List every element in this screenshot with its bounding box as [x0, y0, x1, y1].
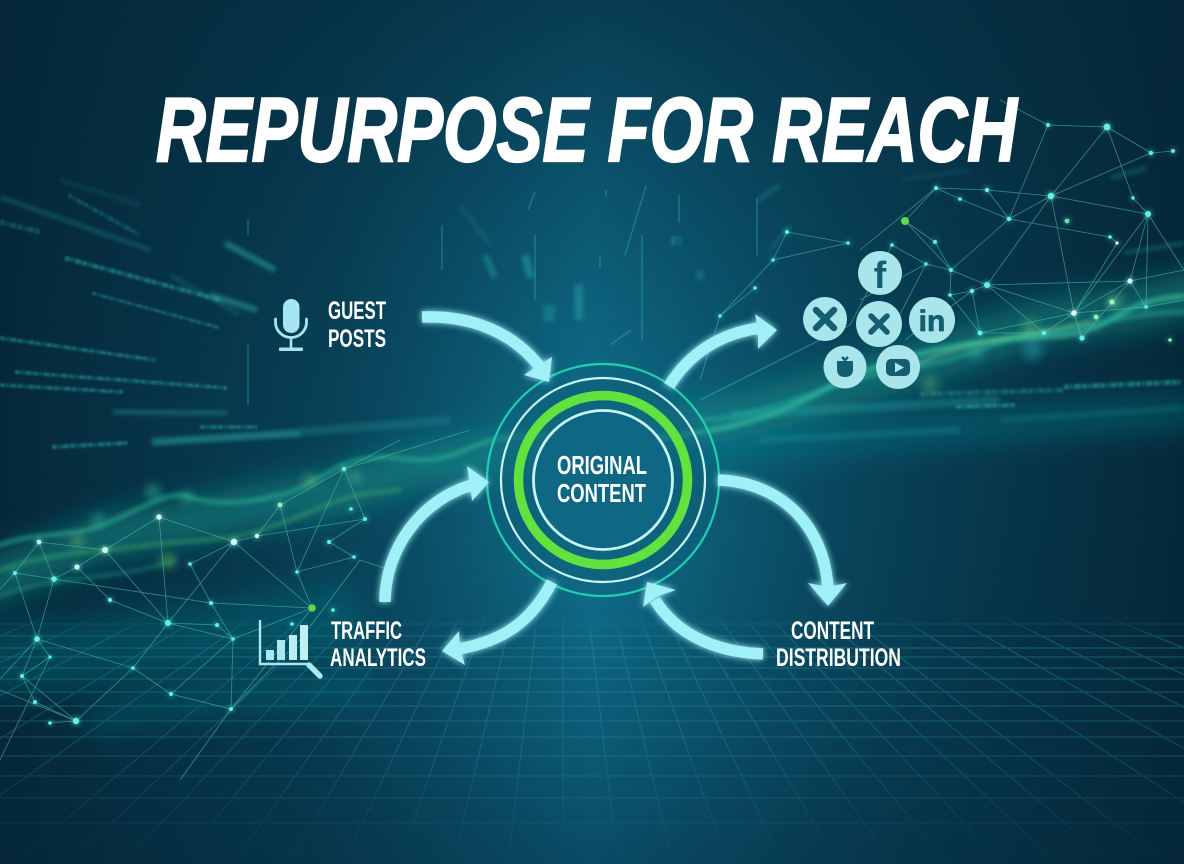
- facebook: f: [874, 255, 887, 297]
- hub label: CONTENT: [557, 478, 646, 508]
- arrow: hub to traffic analytics: [442, 582, 552, 665]
- icon: microphone: [276, 299, 306, 351]
- facebook: [858, 251, 902, 297]
- x center: [856, 301, 902, 347]
- youtube: [876, 345, 920, 389]
- app icon: [824, 346, 866, 388]
- label: traffic analytics: ANALYTICS: [330, 644, 426, 672]
- linkedin: in: [919, 305, 945, 338]
- icon: social media cluster: [803, 251, 955, 389]
- linkedin: [909, 297, 955, 343]
- arrow: hub to social channels: [669, 314, 777, 386]
- arrow: hub to content distribution: [718, 480, 847, 606]
- arrow: traffic analytics to hub: [385, 466, 489, 602]
- arrow: guest posts to hub: [422, 317, 552, 382]
- label: content distribution: CONTENT: [791, 617, 874, 645]
- label: traffic analytics: [330, 617, 426, 672]
- hub label: ORIGINAL: [557, 450, 647, 480]
- icon: analytics chart with magnifier: [260, 620, 320, 676]
- arrow: content distribution to hub: [643, 582, 763, 654]
- hub label: [557, 450, 647, 508]
- label: guest posts: POSTS: [328, 325, 386, 353]
- label: content distribution: [776, 617, 901, 672]
- label: guest posts: [328, 297, 386, 353]
- green node top right: [901, 217, 909, 225]
- label: guest posts: GUEST: [328, 297, 386, 325]
- bokeh glows: [72, 296, 1121, 568]
- label: content distribution: DISTRIBUTION: [776, 644, 901, 672]
- x left: [803, 297, 847, 341]
- green node near analytics: [308, 604, 316, 612]
- label: traffic analytics: TRAFFIC: [331, 617, 402, 645]
- central hub: original content: [487, 364, 719, 596]
